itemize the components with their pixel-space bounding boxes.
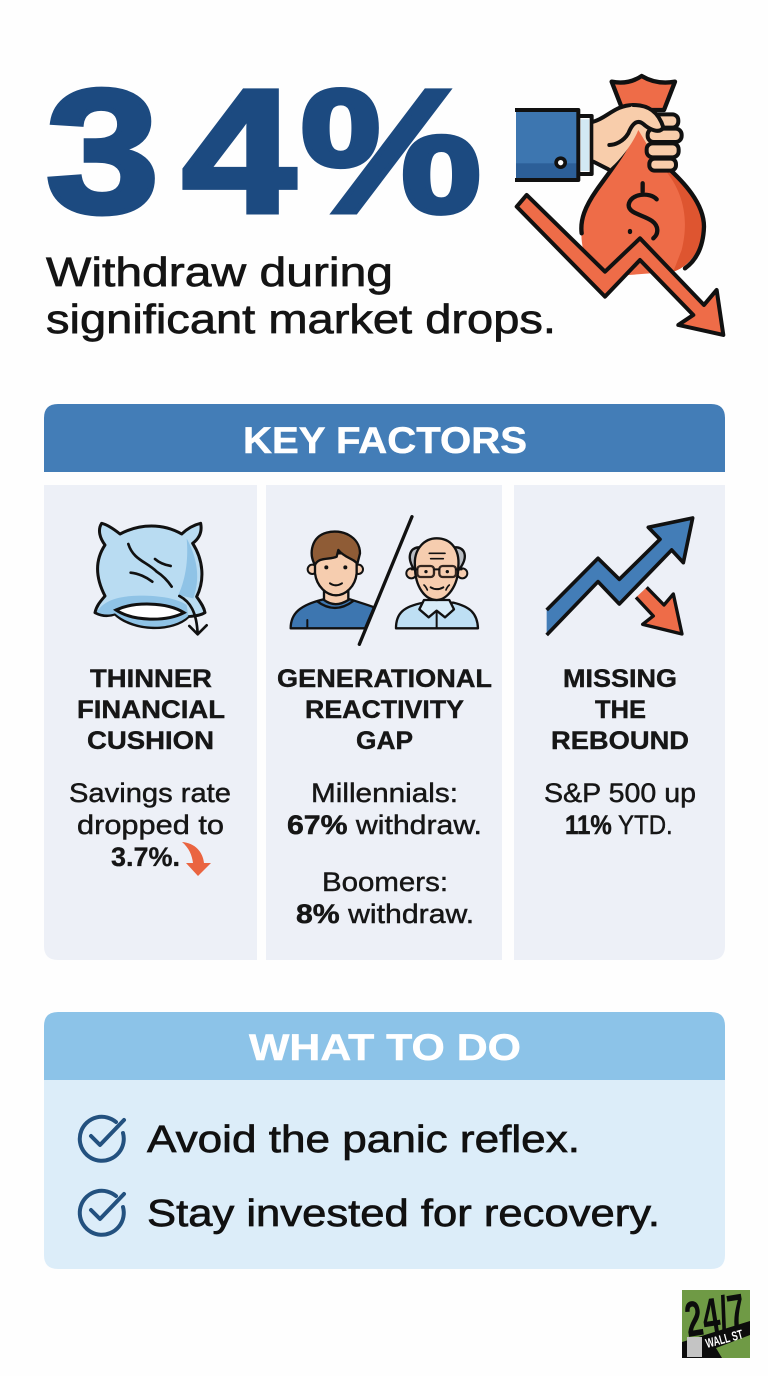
subtitle: significant market drops.: [46, 296, 556, 342]
panel: key factors heading: [44, 404, 725, 472]
heading: CUSHION: [87, 727, 214, 755]
headline statistic: 34%: 4: [182, 53, 296, 250]
heading: THINNER: [90, 665, 212, 693]
heading: THE: [595, 696, 646, 724]
text block: millennials: Millennials:: [311, 778, 458, 808]
icon: hand holding money bag with falling arrow: [515, 76, 723, 335]
text block: boomers: 8% withdraw.: [296, 899, 474, 930]
text block: millennials: [287, 778, 482, 841]
action item 2: Stay invested for recovery.: [147, 1193, 660, 1235]
panel: key factors heading: KEY FACTORS: [243, 420, 527, 461]
text block: 11% YTD.: [565, 811, 673, 840]
icon: check mark 2: [80, 1191, 124, 1235]
hand: [593, 105, 663, 170]
icon: younger and older person: [291, 517, 478, 644]
panel: missing the rebound: [514, 485, 725, 960]
heading: [77, 665, 225, 755]
dollar sign: [629, 183, 657, 238]
logo: 24/7 Wall St: WALL ST: [704, 1327, 745, 1351]
text block: [69, 778, 231, 872]
icon: rising arrow with small drop arrow: [547, 518, 693, 635]
heading: GAP: [356, 727, 413, 755]
falling arrow: [517, 195, 723, 335]
heading: WHAT TO DO: [249, 1027, 521, 1068]
sleeve: [516, 110, 578, 180]
text block: S&P 500 up: [544, 778, 696, 808]
heading: MISSING: [563, 665, 677, 693]
icon: deflating pillow: [95, 523, 207, 634]
heading: FINANCIAL: [77, 696, 225, 724]
subtitle: [46, 249, 556, 342]
headline statistic: 34%: 3: [46, 53, 159, 250]
heading: GENERATIONAL: [277, 665, 492, 693]
heading: [277, 665, 492, 755]
divider slash: [359, 517, 412, 644]
older person: [396, 538, 478, 628]
text block: dropped to: [77, 810, 224, 840]
text block: boomers: [296, 867, 474, 930]
subtitle: Withdraw during: [46, 249, 393, 295]
heading: [551, 665, 689, 755]
heading: REACTIVITY: [305, 696, 464, 724]
headline statistic: 34%: %: [300, 53, 482, 250]
panel: generational reactivity gap: [266, 485, 502, 960]
text block: millennials: 67% withdraw.: [287, 810, 482, 841]
text block: [544, 778, 696, 840]
action item 1: Avoid the panic reflex.: [147, 1119, 580, 1161]
panel: what to do: [44, 1012, 725, 1269]
text block: Savings rate: [69, 778, 231, 808]
text block: 3.7%.: [111, 842, 180, 872]
text block: boomers: Boomers:: [322, 867, 448, 897]
panel: thinner financial cushion: [44, 485, 257, 960]
younger person: [291, 532, 374, 628]
heading: REBOUND: [551, 727, 689, 755]
icon: check mark 1: [80, 1117, 124, 1161]
icon: small down arrow: [182, 842, 211, 876]
logo: 24/7 Wall St: 24/7: [681, 1282, 749, 1348]
